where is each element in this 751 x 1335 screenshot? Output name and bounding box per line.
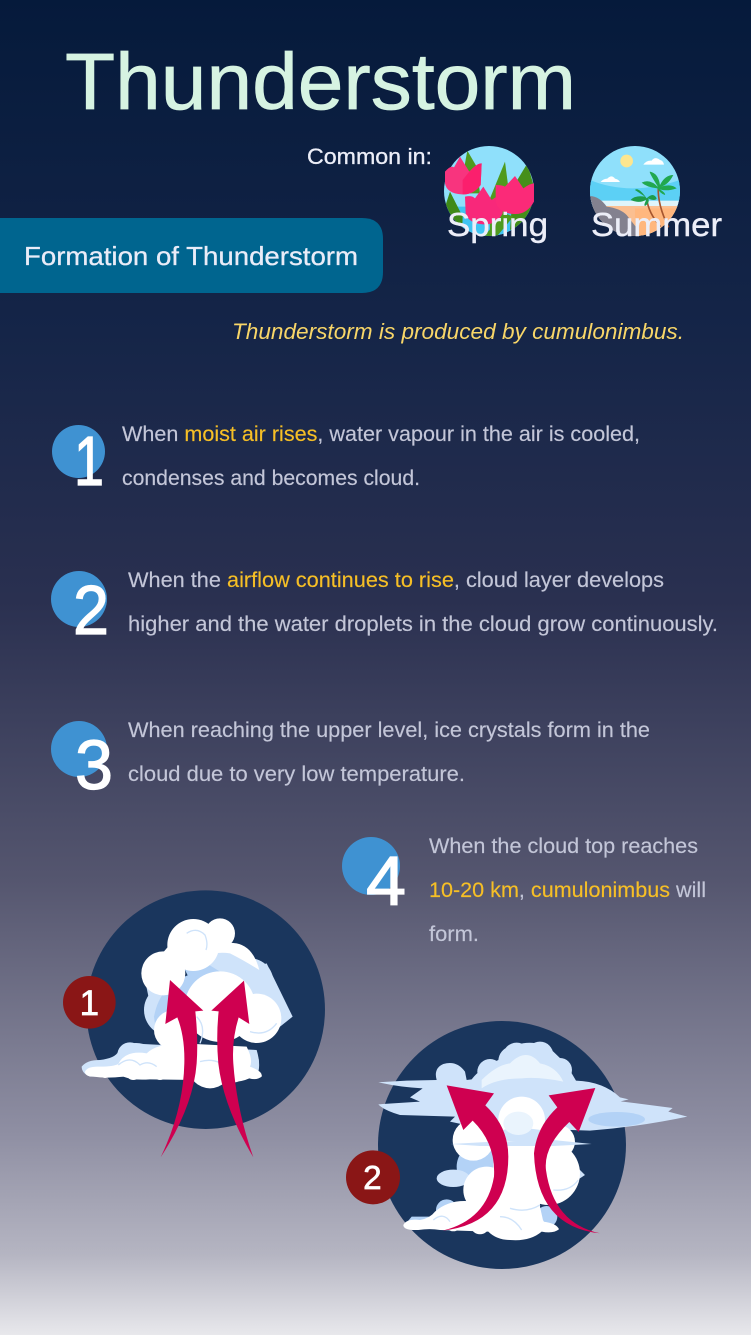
badge 2 — [346, 1150, 400, 1204]
step 1: condenses and becomes cloud. — [122, 467, 420, 490]
label: common in: Common in: — [307, 144, 432, 169]
cloud body white — [403, 1097, 580, 1240]
step 3: 3 — [75, 726, 113, 804]
title: Thunderstorm — [65, 37, 576, 126]
step 3 — [51, 719, 650, 804]
label: summer: Summer — [591, 206, 722, 243]
step 4 — [342, 835, 706, 946]
step 3: When reaching the upper level, ice crystals form in the — [128, 719, 650, 742]
step 3: cloud due to very low temperature. — [128, 763, 465, 786]
cloud 1 detail arcs — [118, 930, 277, 1070]
icon: summer beach — [590, 146, 680, 240]
arrow right — [211, 981, 253, 1157]
arrow right — [534, 1088, 600, 1233]
illustration 2: cumulonimbus — [346, 1021, 687, 1269]
intro sentence: Thunderstorm is produced by cumulonimbus. — [232, 319, 684, 344]
step 1: When moist air rises, water vapour in the air is cooled, — [122, 423, 640, 446]
cloud body back — [403, 1143, 557, 1227]
badge 2: 2 — [363, 1160, 382, 1197]
step 2: 2 — [73, 571, 109, 649]
step 4: 4 — [366, 842, 406, 920]
step 1: 1 — [74, 422, 104, 500]
step 4: form. — [429, 923, 479, 946]
section banner: Formation of Thunderstorm — [24, 241, 358, 271]
illustration 1: rising cloud — [63, 890, 325, 1157]
label: spring: Spring — [447, 206, 548, 243]
badge 1: 1 — [80, 984, 99, 1023]
step 2: When the airflow continues to rise , cloud layer develops — [128, 569, 664, 592]
step 1 — [52, 422, 640, 500]
badge 1 — [63, 976, 116, 1029]
cloud 2 detail arcs — [433, 1180, 578, 1230]
anvil — [378, 1042, 687, 1131]
icon: spring tulips — [443, 146, 537, 237]
step 2 — [51, 569, 718, 649]
arrow left — [443, 1085, 508, 1231]
cloud 1 back layer — [82, 947, 293, 1077]
section banner — [0, 218, 383, 293]
step 4: When the cloud top reaches — [429, 835, 698, 858]
step 4: 10-20 km, cumulonimbus will — [429, 879, 706, 902]
arrow left — [161, 980, 203, 1157]
step 2: higher and the water droplets in the cloud grow continuously. — [128, 613, 718, 636]
cloud 1 white puffs — [85, 918, 281, 1088]
